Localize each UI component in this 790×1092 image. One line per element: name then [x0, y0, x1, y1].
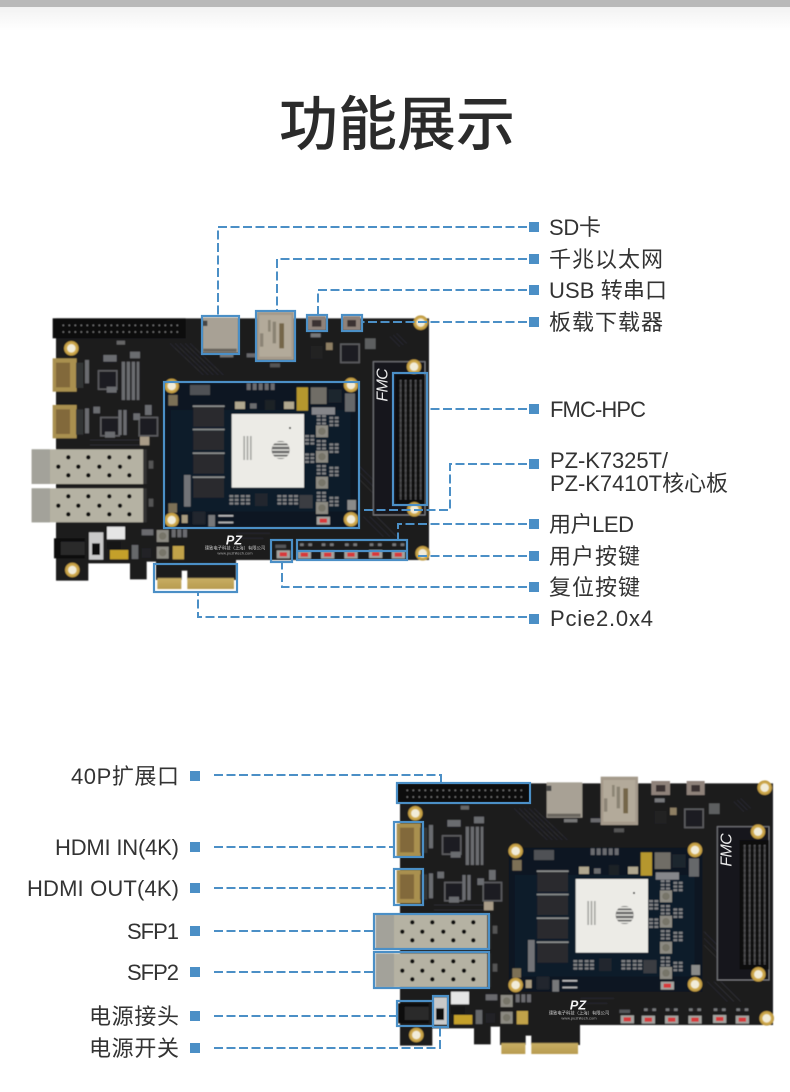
- labels top: Pcie2.0x4: [550, 606, 653, 631]
- labels top: 用户LED: [549, 512, 634, 537]
- board image bottom: [376, 777, 774, 1054]
- labels bottom: HDMI IN(4K): [55, 835, 179, 860]
- leader lines bottom: [214, 775, 441, 1048]
- panel: board top view: [32, 215, 728, 631]
- labels top: 千兆以太网: [549, 247, 663, 272]
- markers top: [529, 222, 539, 624]
- board image top: PZ: [226, 533, 243, 547]
- title: 功能展示: [279, 92, 515, 158]
- labels top: [549, 215, 728, 631]
- labels top: PZ-K7325T/: [550, 448, 669, 473]
- labels top: PZ-K7410T核心板: [550, 471, 728, 496]
- labels bottom: 电源接头: [89, 1004, 179, 1029]
- board image bottom: FMC: [718, 833, 735, 867]
- board image top: www.puzhitech.com: [217, 551, 253, 556]
- labels bottom: [27, 764, 179, 1061]
- board image top: FMC: [374, 368, 391, 402]
- labels top: USB 转串口: [549, 278, 667, 303]
- labels bottom: 电源开关: [89, 1036, 179, 1061]
- board image top: [32, 312, 430, 589]
- board image bottom: www.puzhitech.com: [561, 1016, 597, 1021]
- markers bottom: [190, 771, 200, 1053]
- panel: board bottom view: [27, 764, 774, 1061]
- leader lines top: [198, 227, 527, 617]
- labels top: 复位按键: [549, 575, 640, 600]
- labels top: FMC-HPC: [550, 397, 646, 422]
- labels bottom: HDMI OUT(4K): [27, 876, 179, 901]
- labels top: SD卡: [549, 215, 601, 240]
- board image bottom: 璞致电子科技（上海）有限公司: [549, 1010, 609, 1017]
- highlight frames top: [154, 311, 427, 592]
- labels top: 板载下载器: [549, 310, 663, 335]
- board image top: 璞致电子科技（上海）有限公司: [205, 545, 265, 552]
- labels top: 用户按键: [549, 544, 640, 569]
- board image bottom: PZ: [570, 998, 587, 1012]
- highlight frames bottom: [374, 783, 530, 1027]
- labels bottom: 40P扩展口: [71, 764, 179, 789]
- top shadow strip: [0, 0, 790, 31]
- labels bottom: SFP2: [127, 960, 179, 985]
- labels bottom: SFP1: [127, 919, 179, 944]
